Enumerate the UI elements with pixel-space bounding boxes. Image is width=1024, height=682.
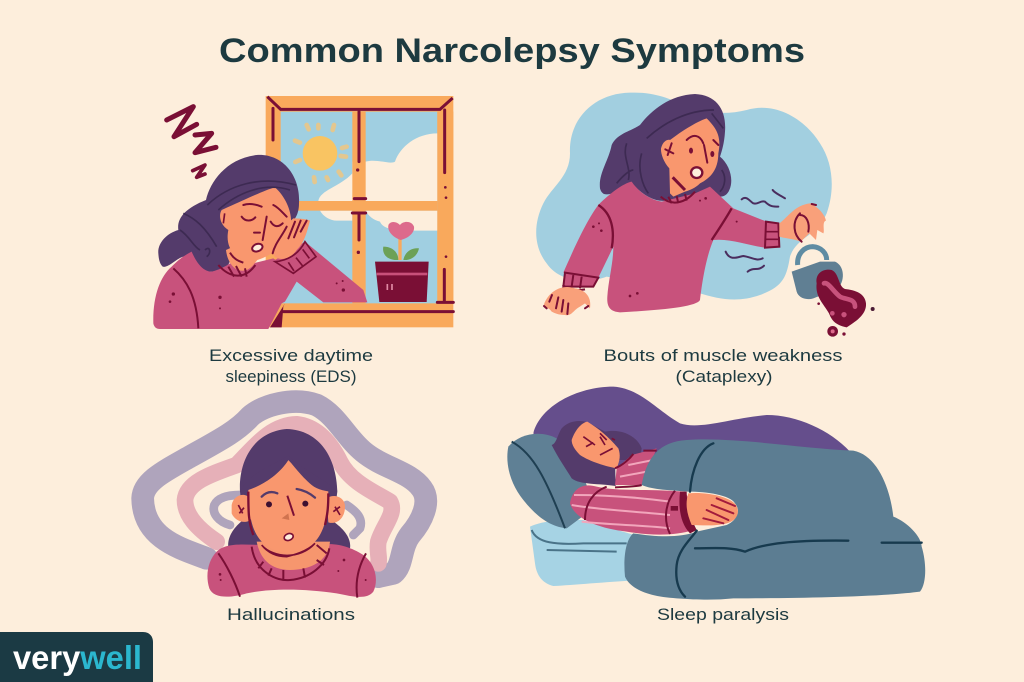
icon: zzz xyxy=(167,107,216,177)
label: hallucinations: Hallucinations xyxy=(227,605,355,624)
title: Common Narcolepsy Symptoms xyxy=(219,32,805,70)
panel: sleep paralysis illustration xyxy=(507,387,925,600)
icon: shocked woman xyxy=(543,94,826,315)
panel: excessive daytime sleepiness illustration xyxy=(153,96,453,329)
icon: mattress xyxy=(530,520,640,586)
logo: verywell: verywell xyxy=(13,639,142,676)
icon: pillow xyxy=(507,434,590,528)
purple background shape xyxy=(533,387,850,480)
label: excessive daytime sleepiness: Excessive daytime xyxy=(209,346,373,365)
panel: hallucinations illustration xyxy=(143,402,426,598)
label: muscle weakness: (Cataplexy) xyxy=(676,367,772,386)
icon: blanket xyxy=(624,439,925,600)
icon: tremor lines xyxy=(726,190,785,272)
panel: muscle weakness illustration xyxy=(536,93,875,337)
label: excessive daytime sleepiness: sleepiness (EDS) xyxy=(226,368,356,386)
icon: spilling cup xyxy=(792,247,875,337)
label: sleep paralysis: Sleep paralysis xyxy=(657,605,789,624)
label: excessive daytime sleepiness xyxy=(209,346,373,386)
swirl rings xyxy=(143,402,426,577)
blob background xyxy=(536,93,832,299)
icon: sleeping woman xyxy=(153,155,367,329)
icon: window xyxy=(266,96,453,327)
icon: worried woman xyxy=(207,429,376,598)
icon: flower pot xyxy=(375,222,429,302)
label: muscle weakness xyxy=(604,346,842,386)
logo: verywell xyxy=(0,632,153,682)
icon: sleeping woman xyxy=(552,421,738,535)
label: muscle weakness: Bouts of muscle weakness xyxy=(604,346,842,365)
